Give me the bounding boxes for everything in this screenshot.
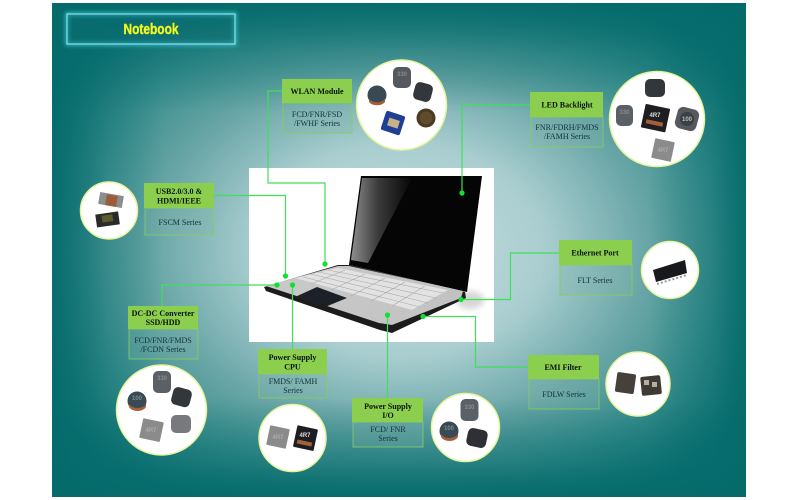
panel: DC-DC Converter: /FCDN Series xyxy=(140,345,186,354)
line: EMI xyxy=(420,314,528,367)
panel: Power Supply CPU: Power Supply xyxy=(269,353,316,362)
line: LED Backlight xyxy=(459,105,530,196)
white laptop photo backdrop xyxy=(249,168,494,342)
panel: USB: HDMI/IEEE xyxy=(157,196,201,206)
panel: DC-DC Converter: SSD/HDD xyxy=(146,318,181,327)
title: Notebook: Notebook xyxy=(124,21,179,38)
laptop illustration xyxy=(264,176,484,333)
panel: Power Supply CPU: FMDS/ FAMH xyxy=(269,377,317,386)
panel: LED Backlight xyxy=(530,92,603,147)
panel: EMI Filter: EMI Filter xyxy=(544,363,582,372)
line: Ethernet xyxy=(458,253,559,302)
laptop base xyxy=(264,265,466,333)
laptop shadow xyxy=(456,291,484,309)
parts circle: Power Supply CPU: 4R7 xyxy=(299,433,311,439)
parts circle: Power Supply I/O: 100 xyxy=(444,426,455,432)
parts circle: LED Backlight: 4R7 xyxy=(649,113,661,119)
line: DC-DC xyxy=(162,282,280,306)
panel: Ethernet Port xyxy=(559,240,632,295)
parts circle: Power Supply I/O xyxy=(432,394,500,462)
line: Power Supply I/O xyxy=(385,312,390,398)
line: USB xyxy=(214,196,288,279)
panel: WLAN Module: /FWHF Series xyxy=(294,119,340,128)
panel: Power Supply CPU xyxy=(258,349,327,398)
panel: LED Backlight: LED Backlight xyxy=(541,100,593,110)
parts circle: USB xyxy=(80,182,138,239)
panel: Power Supply I/O: I/O xyxy=(382,411,394,420)
parts circle: WLAN xyxy=(356,60,446,150)
parts circle: DC-DC: 100 xyxy=(132,396,143,402)
parts circle: LED Backlight: 4R7 xyxy=(657,148,669,154)
laptop screen xyxy=(349,176,482,292)
parts circle: LED Backlight: 330 xyxy=(619,110,630,116)
parts circle: Power Supply I/O: 330 xyxy=(464,405,475,411)
parts circle: Power Supply CPU: 4R7 xyxy=(272,435,284,441)
parts circle: Power Supply CPU xyxy=(259,404,326,472)
panel: LED Backlight: FNR/FDRH/FMDS xyxy=(535,123,599,132)
panel: Power Supply I/O: FCD/ FNR xyxy=(370,425,406,434)
panel: DC-DC Converter xyxy=(128,306,198,359)
panel: Power Supply I/O: Power Supply xyxy=(364,402,412,411)
line: Power Supply CPU xyxy=(290,282,295,349)
panel: USB: USB2.0/3.0 & xyxy=(156,187,203,196)
parts circle: WLAN: 330 xyxy=(397,72,408,78)
title: Notebook xyxy=(67,14,235,44)
panel: Ethernet Port: FLT Series xyxy=(578,276,612,285)
panel: WLAN Module xyxy=(282,79,352,133)
panel: DC-DC Converter: DC-DC Converter xyxy=(132,309,195,318)
panel: Power Supply I/O: Series xyxy=(378,434,398,443)
parts circle: Ethernet Port xyxy=(642,242,698,298)
panel: DC-DC Converter: FCD/FNR/FMDS xyxy=(134,336,192,345)
parts circle: DC-DC xyxy=(116,365,206,455)
panel: EMI Filter: FDLW Series xyxy=(542,390,586,399)
panel: Ethernet Port: Ethernet Port xyxy=(571,248,619,258)
panel: LED Backlight: /FAMH Series xyxy=(544,132,590,141)
panel: WLAN Module: WLAN Module xyxy=(290,87,344,96)
panel: WLAN Module: FCD/FNR/FSD xyxy=(292,110,342,119)
parts circle: EMI Filter xyxy=(606,352,670,416)
panel: USB: FSCM Series xyxy=(159,218,201,227)
line: WLAN xyxy=(268,91,328,267)
panel: USB xyxy=(144,183,214,235)
parts circle: LED Backlight xyxy=(610,72,704,166)
panel: EMI Filter xyxy=(528,355,599,409)
parts circle: LED Backlight: 100 xyxy=(682,117,693,123)
panel: Power Supply CPU: CPU xyxy=(284,362,301,372)
panel: Power Supply CPU: Series xyxy=(283,386,303,395)
parts circle: DC-DC: 4R7 xyxy=(145,428,157,434)
panel: Power Supply I/O xyxy=(352,398,423,447)
connector lines xyxy=(162,91,559,398)
parts circle: DC-DC: 330 xyxy=(157,376,168,382)
